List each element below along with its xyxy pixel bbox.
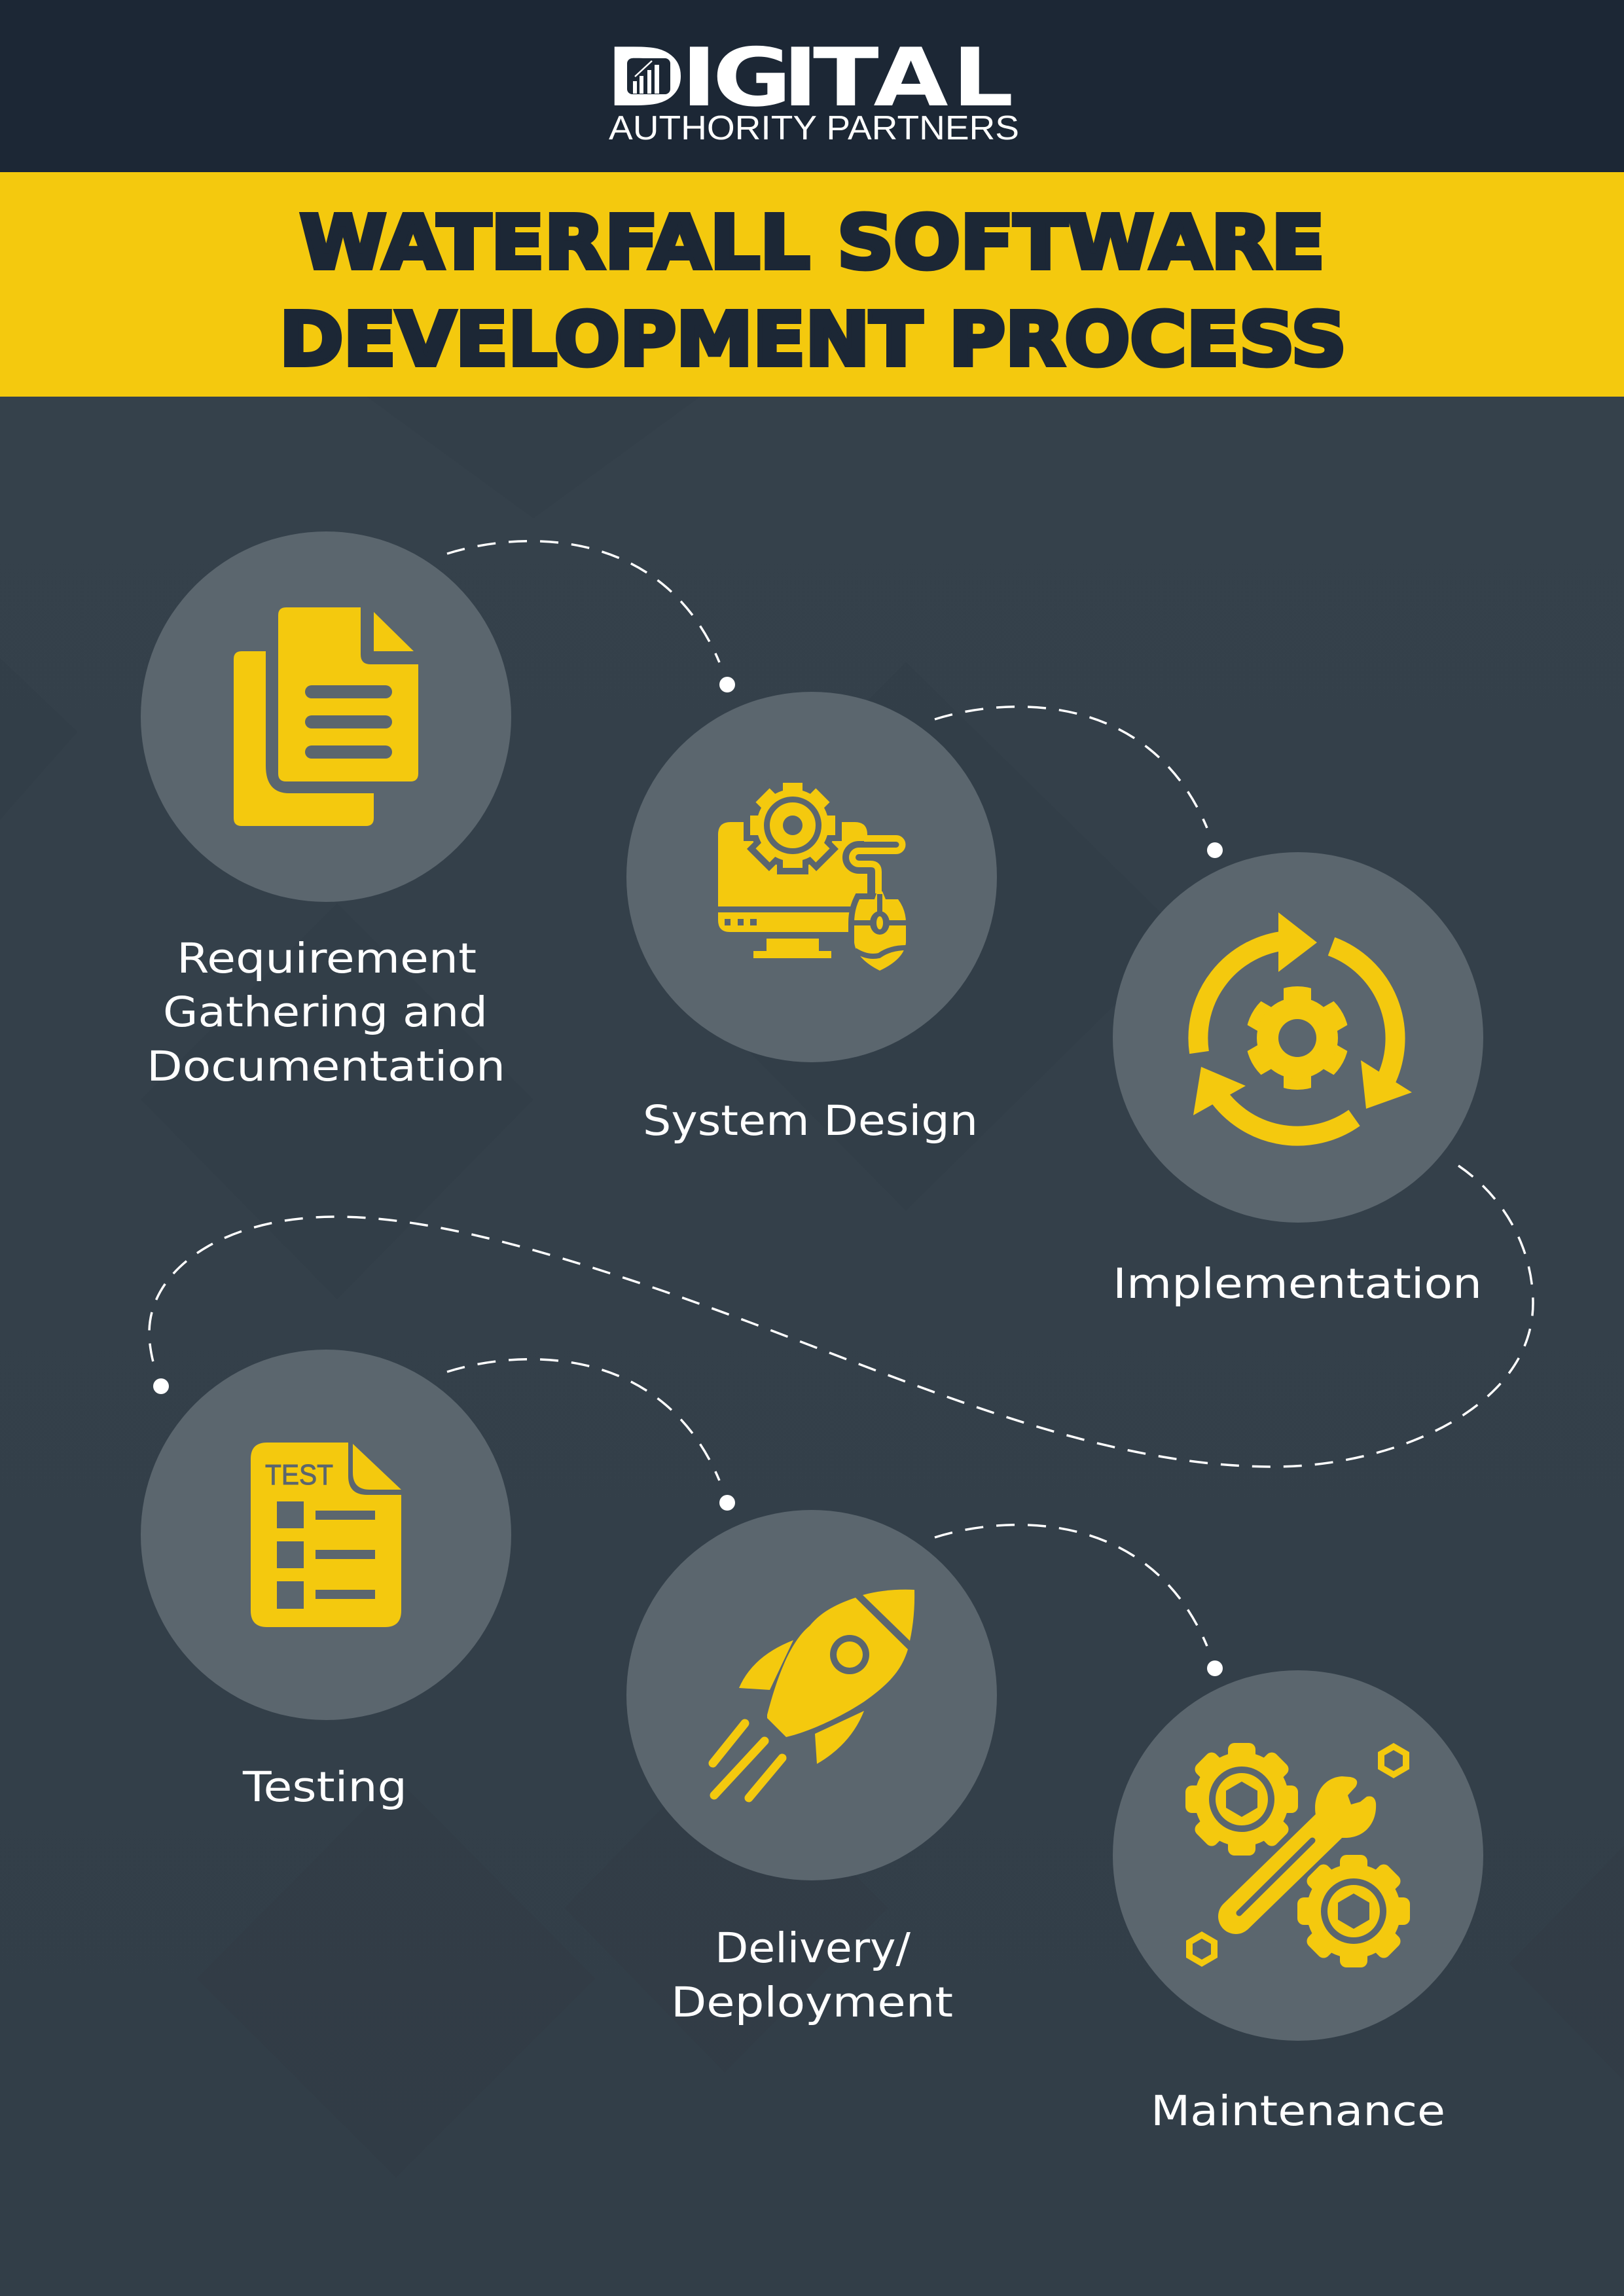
title <box>280 200 1346 382</box>
step 1 label: Requirement <box>177 935 477 982</box>
icon: rocket <box>713 1590 914 1798</box>
step 1 label line 2: Gathering and <box>163 988 488 1036</box>
step 1 label line 3: Documentation <box>147 1043 505 1090</box>
step 4: testing <box>141 1350 511 1811</box>
icon: monitor, gear and mouse <box>718 776 906 971</box>
step 6 circle <box>1113 1670 1483 2041</box>
step 1 circle <box>141 531 511 902</box>
header bar <box>0 0 1624 172</box>
title: WATERFALL SOFTWARE <box>300 200 1325 285</box>
title: DEVELOPMENT PROCESS <box>280 297 1346 382</box>
icon: cycle arrows and gear <box>1193 912 1412 1136</box>
dashed connector: step 5 to 6 <box>935 1525 1223 1676</box>
icon: test sheet: TEST <box>265 1459 333 1491</box>
logo chart icon <box>627 58 670 94</box>
step 3 circle <box>1113 852 1483 1223</box>
step 5 label line 2: Deployment <box>671 1979 953 2026</box>
step 2: system design <box>626 692 997 1145</box>
step 6 label: Maintenance <box>1151 2087 1445 2135</box>
logo subtitle: AUTHORITY PARTNERS <box>609 109 1019 147</box>
dashed connector: step 2 to 3 <box>935 707 1223 858</box>
step 1: requirement gathering <box>141 531 511 982</box>
step 3 label: Implementation <box>1113 1260 1482 1308</box>
dashed connector: step 3 to 4 <box>149 1166 1533 1467</box>
icon: documents <box>234 607 418 826</box>
dashed connector: step 1 to 2 <box>447 541 735 692</box>
icon: wrench, gears and nuts <box>1185 1743 1410 1967</box>
step 2 label: System Design <box>643 1097 978 1145</box>
logo <box>605 31 1019 147</box>
dashed connector: step 4 to 5 <box>447 1359 735 1511</box>
step 5 label line 1: Delivery/ <box>715 1924 911 1972</box>
icon: test sheet <box>251 1443 401 1627</box>
step 3: implementation <box>1113 852 1483 1308</box>
title band <box>0 172 1624 397</box>
step 6: maintenance <box>1113 1670 1483 2135</box>
logo wordmark: DIGITAL <box>605 31 1013 125</box>
step 4 label: Testing <box>242 1763 407 1811</box>
step 4 circle <box>141 1350 511 1720</box>
step 2 circle <box>626 692 997 1062</box>
step 5 circle <box>626 1510 997 1880</box>
step 5: delivery <box>626 1510 997 2026</box>
